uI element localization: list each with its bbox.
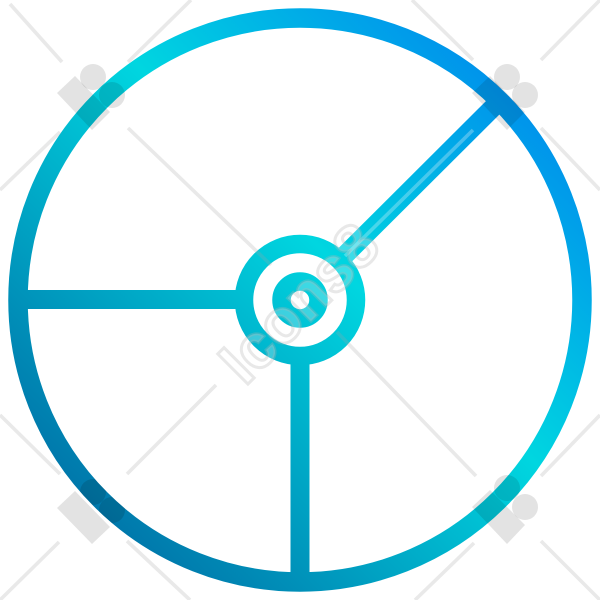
hub outer ring bbox=[244, 244, 356, 356]
watermark: bottom-left circles on ring bbox=[80, 479, 125, 523]
watermark: Icons8 text: Icons8 bbox=[206, 210, 393, 397]
hub inner ring bbox=[282, 282, 318, 318]
bottom spoke bbox=[290, 360, 310, 580]
left spoke bbox=[20, 290, 240, 309]
watermark: logo marks bbox=[57, 64, 538, 544]
diagonal spoke bbox=[343, 104, 496, 257]
